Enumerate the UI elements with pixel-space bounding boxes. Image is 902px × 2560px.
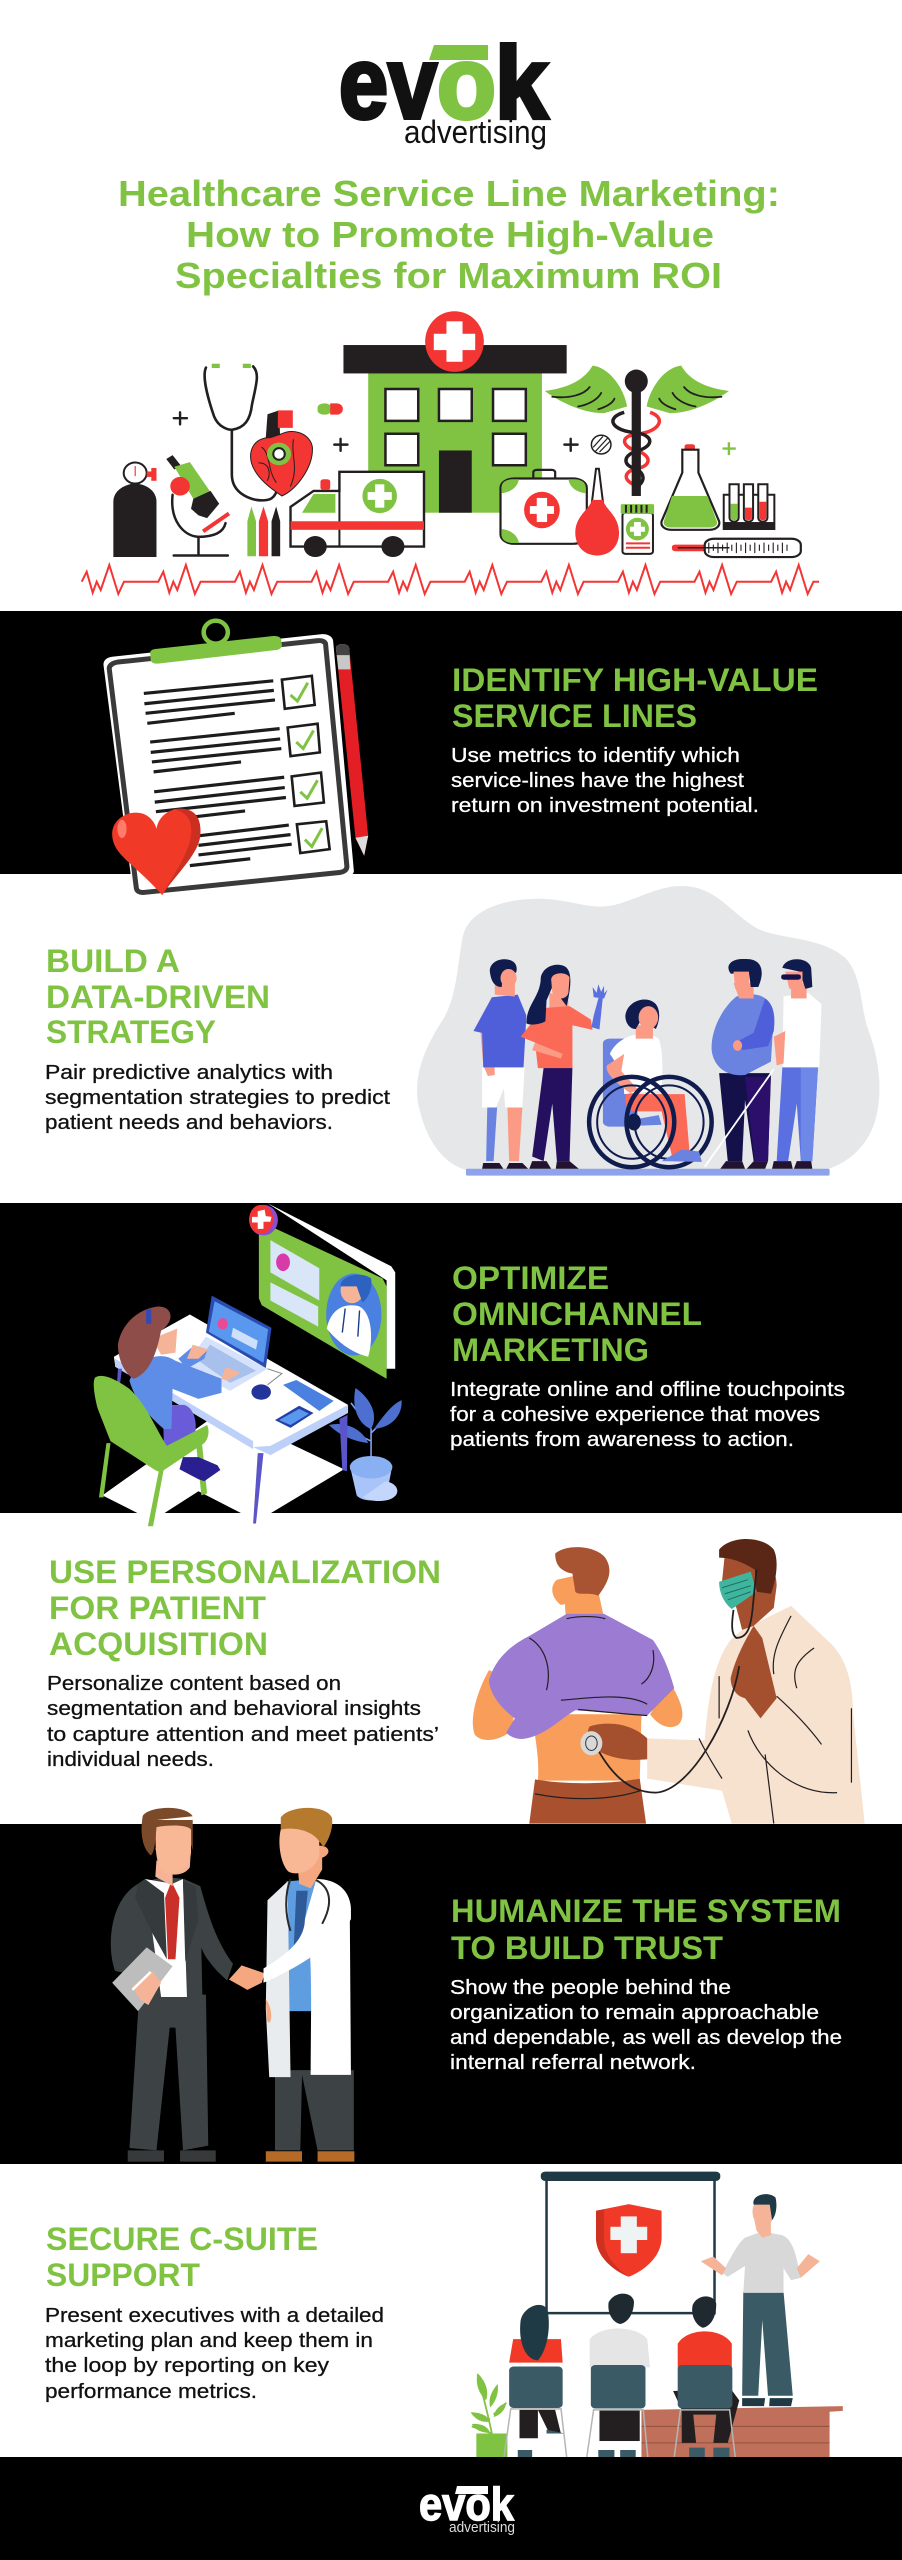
icon: pill — [318, 403, 343, 415]
icons: plus signs — [174, 412, 736, 455]
seated man in grey — [587, 2294, 650, 2457]
body text: to capture attention and meet patients’ — [47, 1723, 439, 1746]
illustration: executive shaking hands with doctor — [111, 1808, 354, 2162]
heading: IDENTIFY HIGH-VALUE — [452, 662, 818, 698]
person with prosthetic leg — [473, 959, 528, 1169]
icon: caduceus — [545, 366, 729, 496]
body text: performance metrics. — [45, 2380, 257, 2403]
illustration: presentation to executives — [471, 2172, 843, 2457]
patient — [473, 1547, 682, 1824]
heading — [46, 943, 270, 1050]
seated man in red — [673, 2296, 739, 2457]
handshake — [229, 1965, 265, 1990]
body text: Show the people behind the — [450, 1976, 731, 1999]
icon: bulb syringe — [575, 469, 619, 555]
woman waving with prosthetic arm — [521, 965, 608, 1169]
body text: Present executives with a detailed — [45, 2304, 384, 2327]
body text: the loop by reporting on key — [45, 2354, 330, 2377]
title: Healthcare Service Line Marketing: — [118, 173, 780, 214]
icon: ambulance — [291, 472, 424, 557]
panel: humanize the system to build trust — [0, 1808, 902, 2164]
body text: service-lines have the highest — [451, 769, 744, 792]
plant — [471, 2373, 507, 2457]
laptop — [184, 1296, 334, 1428]
heading: OPTIMIZE — [452, 1260, 609, 1296]
heading: MARKETING — [452, 1332, 649, 1368]
title — [118, 173, 780, 296]
heading — [451, 1893, 841, 1966]
icon: no sign — [591, 435, 611, 454]
heading — [49, 1554, 441, 1662]
heading: FOR PATIENT — [49, 1590, 266, 1626]
icon: first aid case — [501, 470, 587, 544]
body text: patient needs and behaviors. — [45, 1111, 333, 1134]
doctor — [263, 1808, 354, 2162]
footer band — [0, 2457, 902, 2560]
plant — [329, 1388, 402, 1501]
body text: organization to remain approachable — [450, 2001, 819, 2024]
body text: individual needs. — [47, 1748, 214, 1771]
ECG line — [82, 565, 819, 594]
presenter — [701, 2194, 820, 2406]
header logo: k — [495, 26, 548, 140]
doctor — [580, 1539, 865, 1824]
body text: Personalize content based on — [47, 1672, 341, 1695]
panel: optimize omnichannel marketing — [0, 1203, 902, 1526]
body text: internal referral network. — [450, 2051, 696, 2074]
checklist lines — [144, 681, 292, 866]
illustration: doctor examining patient — [473, 1539, 865, 1824]
icon: test tube rack — [724, 484, 774, 529]
floor — [102, 1411, 344, 1513]
heading: HUMANIZE THE SYSTEM — [451, 1893, 841, 1929]
heading: SECURE C-SUITE — [46, 2221, 318, 2257]
heading: OMNICHANNEL — [452, 1296, 702, 1332]
icon: thermometer — [672, 539, 801, 557]
heading — [452, 1260, 702, 1368]
body text: segmentation strategies to predict — [45, 1086, 390, 1109]
body text: return on investment potential. — [451, 794, 759, 817]
heading: SUPPORT — [46, 2257, 200, 2293]
header logo: ev — [339, 26, 437, 140]
body text — [450, 1976, 842, 2074]
background blob — [417, 886, 879, 1173]
checkboxes — [282, 676, 330, 853]
icon: oxygen tank — [113, 463, 156, 557]
chair seat and back — [94, 1376, 209, 1472]
illustration: diverse group of patients — [417, 886, 879, 1176]
body text — [451, 744, 759, 817]
projection screen — [541, 2172, 720, 2313]
icon: medicine bottle — [621, 504, 654, 554]
green chair legs — [99, 1437, 207, 1526]
body text: Pair predictive analytics with — [45, 1061, 333, 1084]
body text: Integrate online and offline touchpoints — [450, 1378, 845, 1401]
title: How to Promote High-Value — [186, 214, 714, 255]
body text: patients from awareness to action. — [450, 1428, 794, 1451]
illustration: clipboard with checklist and heart — [103, 621, 368, 896]
heart — [112, 809, 200, 895]
panel: build a data-driven strategy — [45, 886, 879, 1176]
body text: and dependable, as well as develop the — [450, 2026, 842, 2049]
seated woman — [504, 2305, 567, 2457]
heading — [452, 662, 818, 734]
heading: BUILD A — [46, 943, 180, 979]
stage — [641, 2406, 843, 2457]
body text — [45, 1061, 390, 1134]
hero medical illustration — [82, 311, 819, 594]
desk — [114, 1315, 348, 1523]
body text: marketing plan and keep them in — [45, 2329, 373, 2352]
woman at desk — [118, 1306, 240, 1481]
check marks — [291, 683, 322, 847]
icon: anatomical heart — [251, 410, 312, 496]
heading: ACQUISITION — [49, 1626, 268, 1662]
video call screen — [249, 1203, 395, 1379]
heading: TO BUILD TRUST — [451, 1930, 723, 1966]
icon: microscope — [166, 455, 229, 555]
heading: SERVICE LINES — [452, 698, 697, 734]
title: Specialties for Maximum ROI — [175, 255, 722, 296]
stethoscope tube — [598, 1666, 739, 1793]
icon: flask — [661, 444, 719, 530]
body text: Use metrics to identify which — [451, 744, 740, 767]
panel: identify high-value service lines — [0, 611, 902, 896]
body text — [47, 1672, 439, 1771]
heading: DATA-DRIVEN — [46, 979, 270, 1015]
footer logo: advertising — [449, 2519, 515, 2536]
executive — [111, 1808, 233, 2162]
man in blue sweater — [712, 959, 774, 1169]
clip — [150, 621, 282, 664]
header logo — [339, 26, 548, 150]
icon: stethoscope — [205, 364, 280, 500]
blind man with cane — [705, 959, 822, 1169]
body text: for a cohesive experience that moves — [450, 1403, 820, 1426]
footer logo: evok — [419, 2478, 514, 2530]
panel: secure c-suite support — [45, 2172, 843, 2457]
illustration: telehealth at a desk — [94, 1203, 402, 1526]
heading: USE PERSONALIZATION — [49, 1554, 441, 1590]
heading — [46, 2221, 318, 2293]
header logo: o — [437, 26, 496, 140]
heading: STRATEGY — [46, 1014, 216, 1050]
panel: use personalization for patient acquisition — [47, 1539, 865, 1824]
icon: hospital — [343, 311, 567, 513]
person in wheelchair — [589, 1000, 712, 1167]
body text: segmentation and behavioral insights — [47, 1697, 421, 1720]
body text — [45, 2304, 384, 2403]
icon: vials — [247, 506, 280, 556]
body text — [450, 1378, 845, 1451]
header logo: advertising — [404, 114, 547, 150]
